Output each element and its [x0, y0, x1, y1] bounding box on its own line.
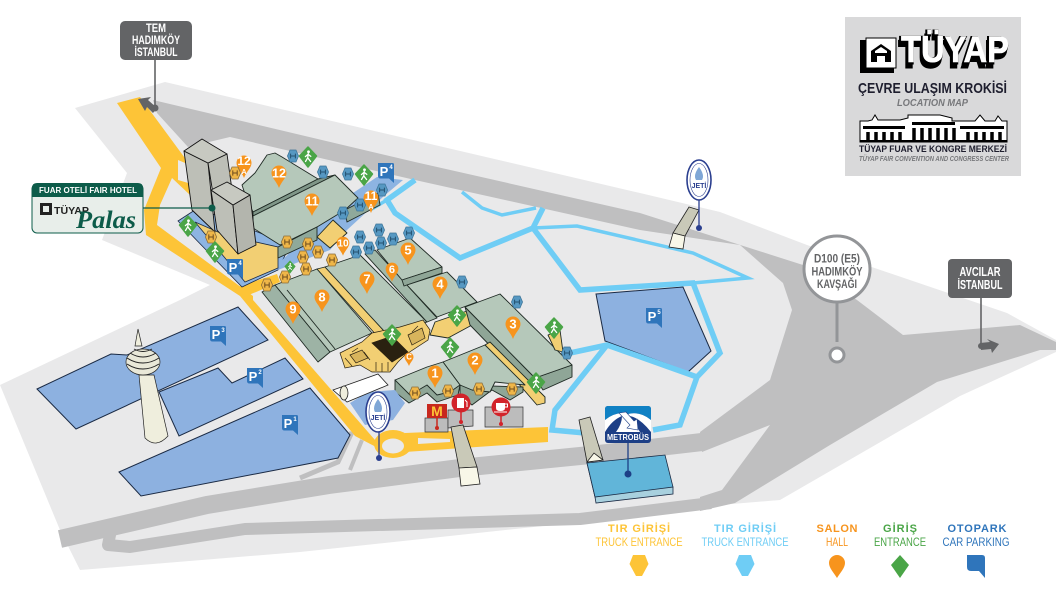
parking 2: P [249, 369, 258, 384]
bus stop marker south [366, 392, 390, 461]
hall 9 [286, 302, 300, 324]
parking 5: 5 [657, 310, 661, 316]
blue truck gate icons [287, 150, 573, 359]
legend: yellow truck entrance: TIR GİRİŞİ [608, 522, 670, 535]
hall 11 [253, 175, 358, 245]
callout: hotel: Palas [75, 207, 136, 234]
callout: hotel [32, 183, 216, 234]
hall 11: 11 [305, 194, 319, 208]
parking 4 north: 4 [389, 165, 393, 171]
hall 12 [272, 166, 286, 188]
hall 6: 6 [389, 264, 395, 276]
hall 4: 4 [436, 276, 444, 292]
hall 6 [386, 263, 398, 282]
legend: hall: SALON [816, 523, 858, 535]
hall 2 [468, 352, 482, 375]
hall 1 [428, 366, 442, 388]
hall 5 [377, 238, 442, 280]
car park 2 [159, 358, 303, 436]
hall 4 [407, 272, 477, 317]
hall 3 [465, 307, 535, 392]
parking 3 [210, 326, 226, 346]
logo: TÜYAP [899, 34, 1007, 75]
white tunnel plot [333, 374, 388, 402]
legend: parking: CAR PARKING [942, 535, 1010, 549]
south bridge [451, 425, 477, 468]
callout: D100 junction [804, 236, 870, 362]
building silhouette [860, 115, 1007, 142]
hall 1 side [395, 380, 460, 403]
panel: title card [845, 17, 1021, 176]
legend: entrance: GİRİŞ [883, 522, 917, 535]
panel: exhibition halls [242, 153, 572, 405]
corridor [317, 267, 385, 337]
hall 11A: A [368, 204, 374, 211]
roundabout island [382, 438, 404, 454]
legend: blue truck entrance: TIR GİRİŞİ [714, 522, 776, 535]
parking 4 hotel [227, 259, 243, 279]
callout: hotel: TÜYAP [54, 204, 89, 217]
legend: yellow truck entrance: TRUCK ENTRANCE [596, 535, 682, 549]
hall 8 [314, 290, 330, 312]
car park 1 [119, 388, 350, 496]
entrance block [430, 310, 472, 338]
bus stop marker north [687, 160, 711, 231]
callout: TEM Hadımköy: İSTANBUL [134, 46, 178, 59]
callout: Avcılar İstanbul: İSTANBUL [958, 277, 1003, 292]
icon: McDonald's [427, 403, 447, 430]
parking 2 [247, 368, 263, 388]
parking 5: P [648, 309, 657, 324]
motorway network [60, 100, 1056, 547]
car park 3 [37, 307, 268, 429]
overpass bridges [451, 207, 699, 486]
hall 2 side [460, 385, 523, 405]
parking 1: P [284, 416, 293, 431]
hotel towers [184, 139, 256, 254]
callout: Avcılar İstanbul: AVCILAR [960, 265, 1000, 279]
hall 4 [432, 276, 448, 299]
hall 9: 9 [289, 302, 297, 316]
main building [340, 320, 430, 372]
hall 12 [242, 153, 318, 212]
truck route: yellow [117, 97, 548, 458]
panel: car parks [37, 287, 711, 496]
lane 6 [365, 250, 437, 322]
north bridge [673, 207, 699, 236]
icon: coffee [492, 398, 510, 426]
hall 11 [304, 194, 320, 216]
yellow truck gate icons [205, 167, 518, 399]
corridor 3-2 [485, 342, 545, 405]
legend [596, 522, 1010, 578]
parking 4 hotel: 4 [238, 261, 242, 267]
parking 1 [282, 415, 298, 435]
parking 2: 2 [258, 370, 262, 376]
parking 4 hotel: P [229, 260, 238, 275]
parking icons [210, 163, 662, 435]
metro bridge [579, 417, 603, 462]
callout: hotel: FUAR OTELİ FAIR HOTEL [39, 186, 137, 195]
metro platform [587, 455, 673, 503]
hall 5 [400, 242, 416, 265]
legend: blue truck entrance: TRUCK ENTRANCE [702, 535, 788, 549]
hall 10: 10 [337, 238, 349, 249]
parking 4 north [378, 163, 394, 183]
parking 5 [646, 308, 662, 328]
hall 1 [395, 362, 460, 395]
hall 2: 2 [471, 352, 479, 368]
bus stop plot [350, 390, 405, 425]
legend: hall [816, 523, 858, 578]
hall C [404, 352, 414, 366]
callout: TEM Hadımköy [120, 21, 192, 113]
bus stop marker south: JETİ [371, 414, 385, 422]
hall 10 [337, 237, 349, 256]
service platforms [425, 407, 523, 432]
icon: McDonald's: M [431, 403, 443, 419]
small entrance icon [285, 261, 295, 273]
legend: parking: OTOPARK [948, 523, 1007, 535]
hall 3 [506, 316, 520, 339]
callout: D100 junction: D100 (E5) [814, 252, 860, 266]
hall pins [236, 154, 520, 388]
callout: D100 junction: KAVŞAĞI [817, 276, 857, 291]
legend: parking [942, 523, 1010, 578]
yellow annex [317, 220, 347, 248]
car park 5 [596, 287, 711, 372]
hall 1: 1 [431, 366, 439, 380]
hall 12A: A [241, 169, 247, 176]
hall 11A: 11 [365, 189, 378, 203]
legend: yellow truck entrance [596, 522, 682, 576]
heading: ÇEVRE ULAŞIM KROKİSİ [858, 80, 1007, 97]
hall 9 and 8 [262, 285, 330, 362]
hall 12A [236, 154, 252, 178]
callout: Avcılar İstanbul [948, 259, 1012, 353]
parking 3: P [212, 327, 221, 342]
venue name english: TÜYAP FAIR CONVENTION AND CONGRESS CENTER [859, 154, 1009, 163]
hall 2 [443, 345, 525, 392]
bus stop marker north: JETİ [692, 182, 706, 190]
hall 11A [364, 189, 378, 213]
parking 1: 1 [293, 417, 297, 423]
icon: fuel [452, 394, 470, 424]
hall 12A: 12 [237, 154, 251, 168]
hall 7: 7 [363, 272, 371, 286]
logo: TÜYAP [901, 29, 1009, 70]
hall 7 [325, 255, 427, 332]
callout: TEM Hadımköy: HADIMKÖY [132, 34, 180, 47]
legend: hall: HALL [826, 535, 848, 549]
venue name: TÜYAP FUAR VE KONGRE MERKEZİ [859, 144, 1007, 155]
logo [860, 29, 1009, 75]
legend: entrance [874, 522, 926, 578]
legend: blue truck entrance [702, 522, 788, 576]
hall 8: 8 [318, 290, 326, 304]
hall 7 [360, 272, 374, 294]
tower landmark [126, 329, 168, 443]
legend: entrance: ENTRANCE [874, 535, 926, 549]
hall 3: 3 [509, 316, 517, 332]
subheading: LOCATION MAP [897, 97, 969, 109]
logo: TÜYAP [900, 30, 1008, 71]
hall 5: 5 [404, 242, 412, 258]
callout: TEM Hadımköy: TEM [146, 23, 166, 35]
metrobus marker [605, 406, 651, 478]
truck route: blue [370, 180, 748, 433]
parking 3: 3 [221, 328, 225, 334]
hall 12: 12 [272, 166, 286, 180]
entrance icons [180, 147, 562, 393]
parking 4 north: P [380, 164, 389, 179]
callout: D100 junction: HADIMKÖY [812, 264, 862, 278]
hall C: C [406, 353, 412, 362]
panel: hotel plot [178, 177, 403, 287]
metrobus marker: METROBÜS [607, 433, 650, 442]
